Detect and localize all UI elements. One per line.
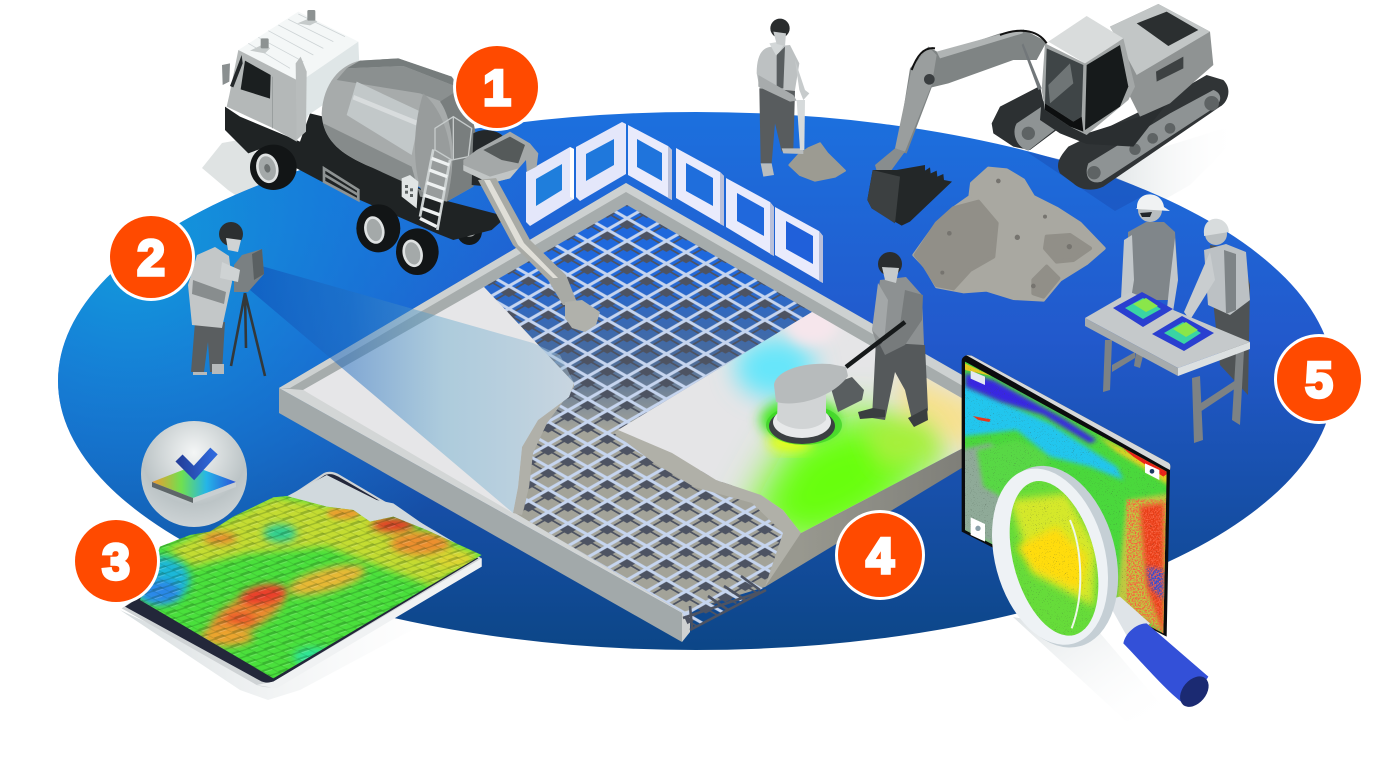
cab: [222, 10, 360, 142]
badge 1: 1: [483, 60, 511, 116]
tablet shell: [122, 472, 482, 687]
cab: [1042, 16, 1135, 135]
map UI buttons: [971, 371, 1159, 542]
worker left: [1120, 194, 1178, 318]
badge 2: [107, 213, 195, 301]
lens ring: [975, 452, 1137, 662]
camera: [234, 249, 264, 292]
far wheel: [457, 218, 482, 245]
excavator shadow on oval: [1027, 152, 1150, 211]
inspection workers and table: [1085, 194, 1250, 443]
sander handle: [846, 322, 905, 367]
badge 5: [1274, 334, 1364, 424]
worker right: [1184, 219, 1250, 395]
operator legs: [872, 340, 928, 420]
badge 2: 2: [137, 230, 165, 286]
lens image: [1010, 481, 1098, 636]
panel 6: [775, 207, 823, 283]
platform rail: [435, 117, 472, 160]
badge 3: [72, 517, 160, 605]
rear wheel 2: [396, 228, 439, 275]
left concrete rim: [484, 287, 574, 515]
tripod: [231, 293, 265, 376]
monitor frame: [962, 355, 1170, 637]
badge 5: 5: [1305, 352, 1333, 408]
table: [1085, 292, 1250, 443]
check mark: [179, 451, 214, 473]
tablet screen: [125, 474, 478, 683]
magnifier shadow: [1013, 617, 1163, 722]
sander operator: [766, 252, 928, 445]
rear wheel 1: [356, 204, 400, 252]
concrete slab formwork: [250, 183, 990, 642]
concrete chute: [478, 178, 600, 332]
background oval: [58, 112, 1334, 650]
far track: [992, 86, 1057, 151]
operator torso: [872, 277, 924, 345]
upper body: [1110, 4, 1213, 117]
panel 3: [628, 125, 672, 200]
hopper: [463, 132, 538, 183]
panel 1: [526, 147, 574, 226]
right scanned concrete heatmap: [618, 312, 962, 533]
right concrete rim: [614, 430, 801, 587]
window formwork panels: [526, 122, 823, 283]
monitor with scan map: [960, 355, 1173, 640]
sander machine: [766, 364, 848, 445]
rebar mesh: [488, 205, 806, 626]
near track: [1058, 75, 1228, 190]
heat map surface: [140, 496, 482, 678]
cement mixer truck: [222, 10, 538, 275]
side guard: [324, 168, 358, 200]
badge 3: 3: [102, 534, 130, 590]
chassis: [225, 107, 507, 240]
operator head: [878, 252, 902, 283]
camera beam: [250, 265, 574, 513]
bucket linkage: [875, 148, 905, 177]
left poured concrete: [303, 287, 574, 513]
right concrete front face: [765, 447, 965, 587]
panel 5: [726, 178, 774, 256]
truck shadow: [202, 138, 276, 205]
boots: [858, 408, 928, 427]
bucket: [867, 165, 952, 226]
panel 4: [676, 148, 724, 226]
sphere icon: verified slab: [141, 421, 247, 527]
deck: [1040, 100, 1168, 147]
front wheel: [250, 145, 297, 190]
shovel worker: [757, 19, 845, 181]
operator: [188, 222, 243, 375]
control box: [402, 175, 418, 208]
analysis tablet with 3D heat map: [120, 472, 487, 690]
excavator: [867, 4, 1228, 226]
mini slab: [152, 466, 236, 503]
protruding rebar: [683, 576, 766, 630]
poured concrete drop: [565, 300, 600, 332]
mesh floor: [484, 205, 965, 612]
table tablet left: [1113, 292, 1173, 327]
scan map: [960, 357, 1173, 640]
camera operator and tripod: [188, 222, 265, 376]
mixer drum: [322, 58, 503, 202]
exhaust: [296, 57, 307, 140]
magnifying glass: [974, 452, 1214, 712]
sander motor: [830, 377, 864, 412]
badge 1: [453, 43, 541, 131]
table tablet right: [1152, 316, 1214, 351]
boom: [895, 29, 1047, 153]
badge 4: [835, 510, 925, 600]
panel 2: [576, 122, 626, 201]
badge 4: 4: [866, 528, 894, 584]
blue handle: [1123, 623, 1214, 712]
tablet shadow: [120, 575, 482, 700]
ladder: [420, 149, 450, 230]
tablet side edge: [257, 558, 482, 688]
large dirt pile: [914, 168, 1104, 300]
handle stem: [1107, 597, 1150, 642]
excavator shadow: [1090, 128, 1240, 225]
slab walls: [279, 183, 990, 642]
dirt pile small: [789, 143, 845, 181]
